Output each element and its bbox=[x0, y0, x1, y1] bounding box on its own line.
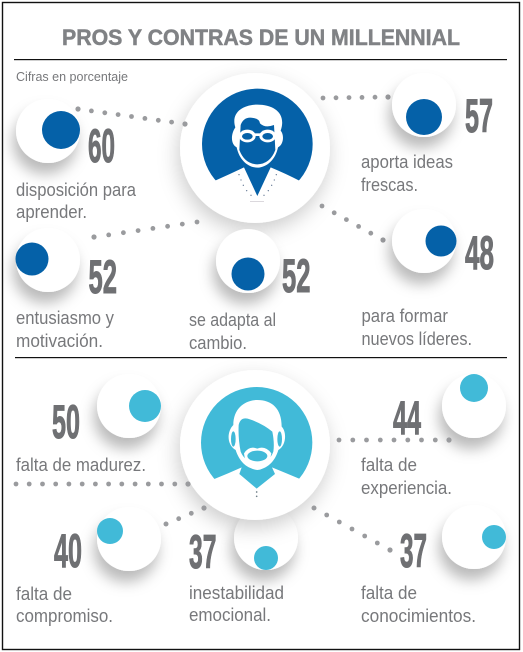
item: para formar nuevos líderes 48 bbox=[362, 209, 494, 349]
dotted connectors: pros bbox=[75, 94, 391, 243]
item: para formar nuevos líderes 48: para formar bbox=[362, 305, 448, 326]
item: entusiasmo y motivación 52: entusiasmo y bbox=[16, 307, 115, 328]
item: aporta ideas frescas 57: 57 bbox=[465, 89, 493, 142]
item: para formar nuevos líderes 48: nuevos líderes. bbox=[362, 328, 472, 349]
item: inestabilidad emocional 37: 37 bbox=[189, 525, 216, 578]
subtitle: units: Cifras en porcentaje bbox=[16, 69, 128, 84]
item: inestabilidad emocional 37 bbox=[189, 506, 298, 625]
item: falta de conocimientos 37 bbox=[361, 505, 506, 626]
icon: cons avatar with beard bbox=[180, 370, 330, 520]
item: falta de compromiso 40: 40 bbox=[54, 524, 82, 577]
item: falta de madurez 50: falta de madurez. bbox=[16, 454, 146, 475]
item: falta de experiencia 44: falta de bbox=[361, 454, 417, 475]
item: entusiasmo y motivación 52 bbox=[16, 228, 117, 351]
icon: pros avatar with glasses bbox=[180, 73, 330, 223]
item: falta de conocimientos 37: falta de bbox=[361, 582, 417, 603]
item: falta de compromiso 40: falta de bbox=[16, 583, 72, 604]
item: disposición para aprender 60: aprender. bbox=[16, 201, 87, 222]
item: falta de madurez 50: 50 bbox=[52, 395, 80, 448]
item: se adapta al cambio 52: se adapta al bbox=[189, 309, 276, 330]
item: se adapta al cambio 52 bbox=[189, 229, 310, 353]
item: se adapta al cambio 52: 52 bbox=[282, 249, 310, 302]
item: disposición para aprender 60: 60 bbox=[88, 119, 115, 172]
item: aporta ideas frescas 57: aporta ideas bbox=[361, 151, 453, 172]
item: falta de madurez 50 bbox=[16, 374, 161, 475]
item: falta de experiencia 44 bbox=[361, 374, 506, 498]
dotted connectors: cons bbox=[14, 437, 452, 553]
item: entusiasmo y motivación 52: motivación. bbox=[16, 330, 103, 351]
item: se adapta al cambio 52: cambio. bbox=[189, 332, 247, 353]
item: aporta ideas frescas 57: frescas. bbox=[361, 174, 418, 195]
item: aporta ideas frescas 57 bbox=[361, 73, 493, 195]
item: entusiasmo y motivación 52: 52 bbox=[88, 250, 117, 303]
item: inestabilidad emocional 37: emocional. bbox=[189, 604, 271, 625]
item: falta de experiencia 44: 44 bbox=[393, 391, 421, 444]
item: inestabilidad emocional 37: inestabilidad bbox=[189, 582, 284, 603]
item: falta de compromiso 40: compromiso. bbox=[16, 605, 113, 626]
title: PROS Y CONTRAS DE UN MILLENNIAL bbox=[62, 25, 460, 50]
item: falta de compromiso 40 bbox=[16, 507, 161, 626]
item: para formar nuevos líderes 48: 48 bbox=[465, 226, 494, 279]
item: falta de conocimientos 37: conocimientos. bbox=[361, 605, 476, 626]
item: disposición para aprender 60: disposición para bbox=[16, 179, 137, 200]
item: disposición para aprender 60 bbox=[16, 99, 137, 222]
item: falta de experiencia 44: experiencia. bbox=[361, 477, 452, 498]
item: falta de conocimientos 37: 37 bbox=[400, 524, 427, 577]
